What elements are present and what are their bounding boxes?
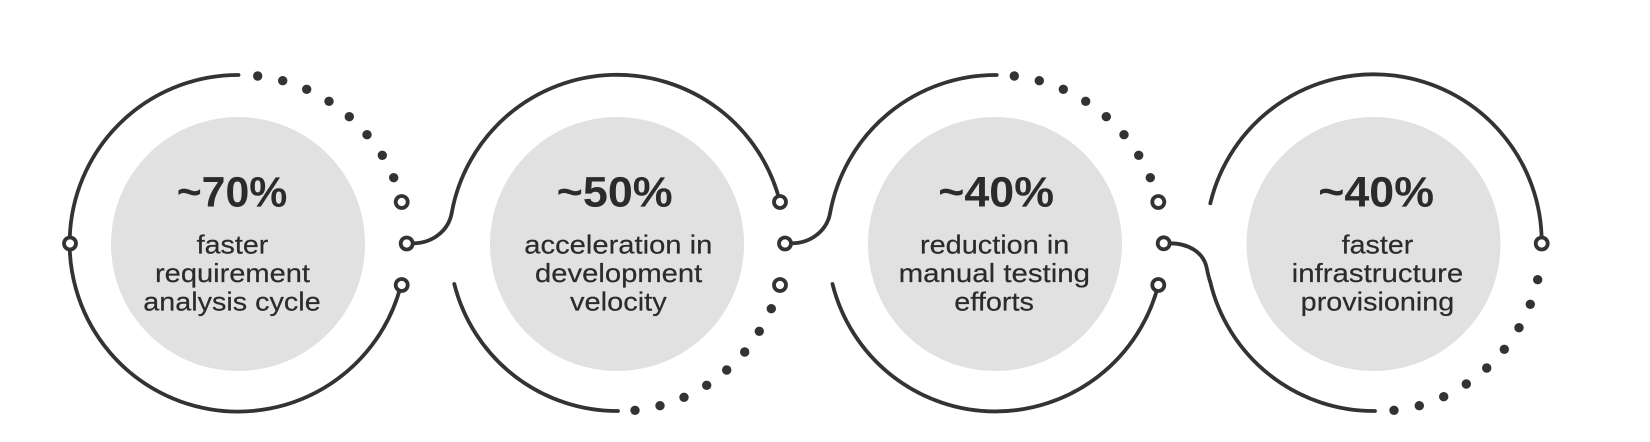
connector 2 to 3 (779, 213, 830, 250)
stat 2: ~50% (557, 169, 673, 217)
panel: faster infrastructure provisioning (1210, 74, 1548, 415)
description 3 (899, 230, 1090, 316)
description 1 (143, 230, 321, 316)
lower arc 3 (832, 284, 1158, 411)
description 2: acceleration in (524, 230, 712, 260)
description 1: faster (197, 230, 269, 260)
upper arc 3 (830, 75, 997, 213)
dotted arc 3 (1010, 71, 1155, 182)
connector 3 to 4 (1158, 237, 1210, 282)
nodes 3 (1152, 196, 1164, 291)
gray disc 1 (111, 117, 365, 371)
solid ring arc 1 (70, 75, 401, 412)
upper arc 4 (1210, 74, 1542, 244)
panel: reduction in manual testing efforts (830, 71, 1164, 411)
node 4 (1536, 238, 1548, 250)
nodes 2 (774, 196, 786, 291)
description 4: infrastructure (1292, 258, 1463, 288)
description 2: velocity (570, 286, 667, 316)
dotted arc 4 (1389, 275, 1542, 415)
gray disc 3 (868, 117, 1122, 371)
description 2 (524, 230, 712, 316)
description 4: provisioning (1301, 286, 1454, 316)
dotted arc 2 (630, 304, 776, 415)
description 1: requirement (155, 258, 311, 288)
gray disc 4 (1246, 117, 1500, 371)
gray disc 2 (490, 117, 744, 371)
stat 3: ~40% (938, 169, 1054, 217)
description 3: efforts (954, 286, 1034, 316)
upper arc 2 (452, 75, 780, 213)
stat 4: ~40% (1318, 169, 1434, 217)
nodes 1 (64, 196, 408, 291)
panel: faster requirement analysis (64, 71, 408, 412)
panel: acceleration in development velocity (452, 75, 786, 415)
description 4: faster (1342, 230, 1414, 260)
description 4 (1292, 230, 1463, 316)
description 3: reduction in (920, 230, 1069, 260)
connector 1 to 2 (401, 213, 452, 250)
description 3: manual testing (899, 258, 1090, 288)
stat 1: ~70% (177, 169, 287, 217)
description 2: development (535, 258, 703, 288)
description 1: analysis cycle (143, 286, 321, 316)
dotted arc 1 (253, 71, 398, 182)
lower arc 4 (1210, 282, 1375, 411)
lower arc 2 (454, 284, 618, 411)
